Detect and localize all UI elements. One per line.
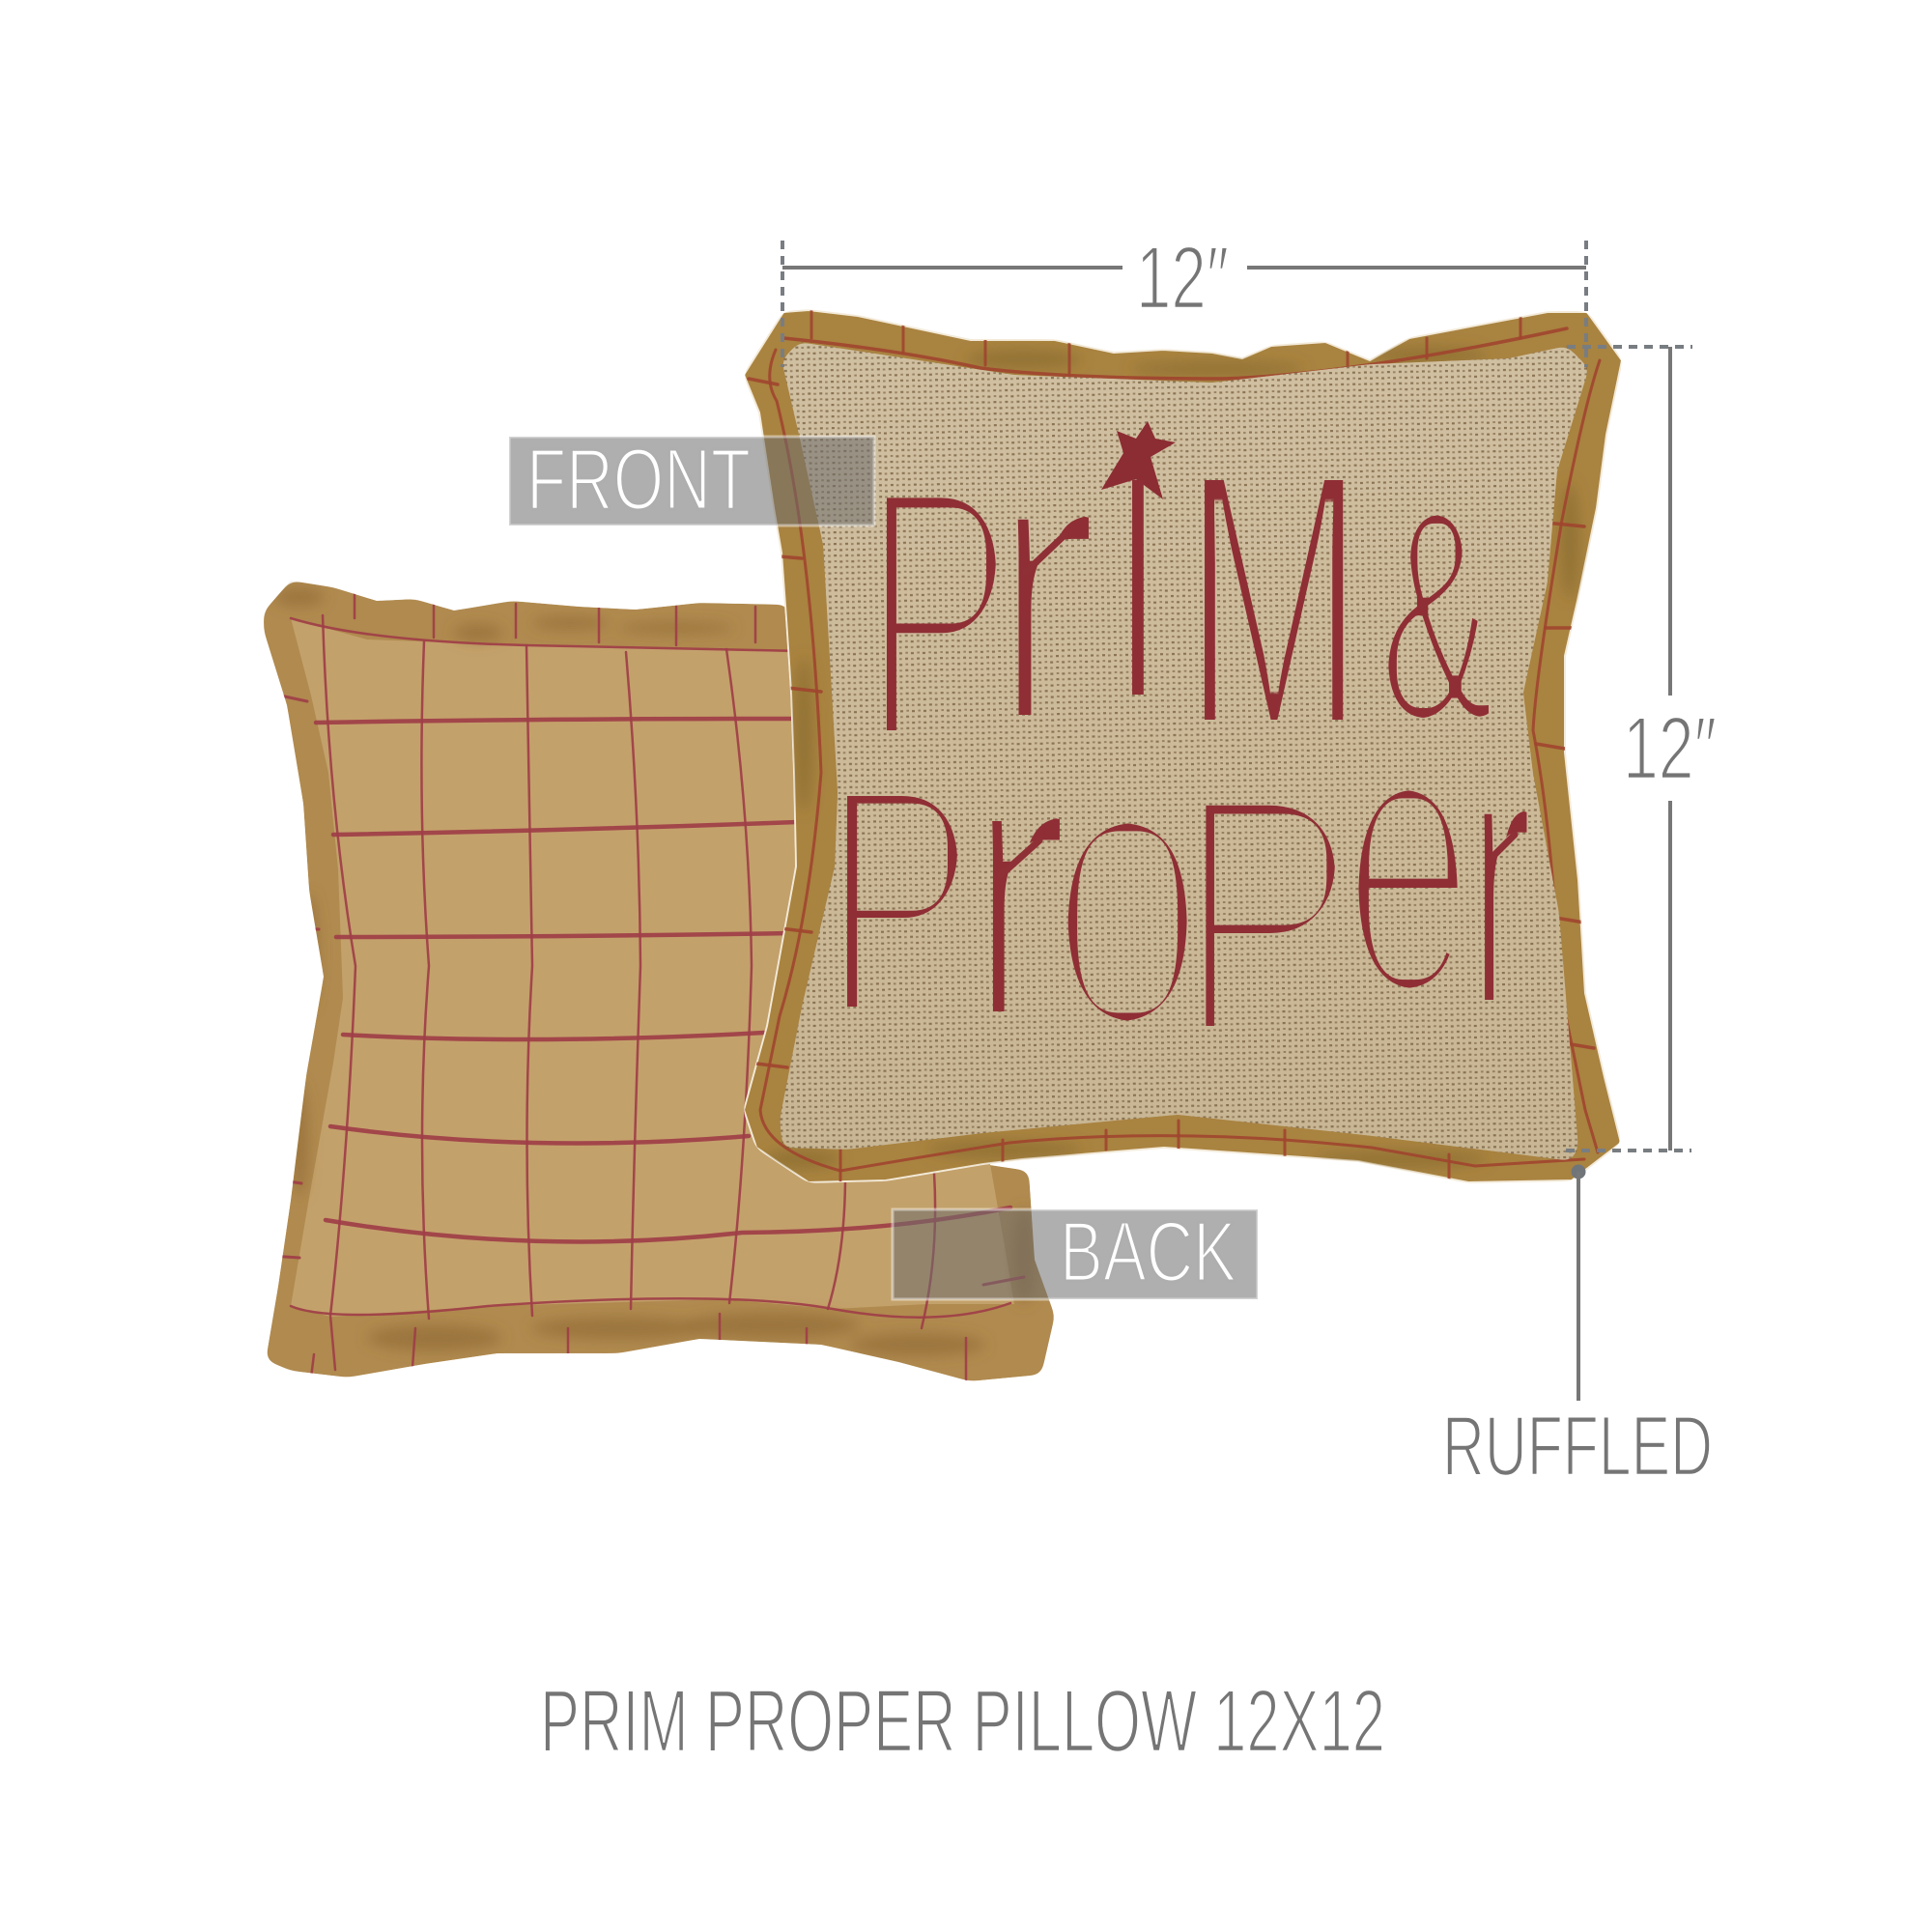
lettering second line o and p: o [1047, 670, 1208, 1110]
back ruffle [264, 581, 1055, 1381]
lettering r in Prim: r [959, 677, 1075, 1095]
height dimension: 12″ [1623, 699, 1717, 798]
ruffled callout [1442, 1165, 1713, 1493]
label: back [893, 1204, 1258, 1299]
lettering second line o and p: P [1175, 722, 1358, 1108]
lettering second line P [823, 638, 1474, 1086]
label: back: BACK [1060, 1204, 1236, 1299]
lettering second line P: e [1343, 638, 1474, 1077]
back pillow [264, 581, 1055, 1381]
lettering second line o and p [1047, 670, 1358, 1110]
lettering first line [863, 398, 1172, 816]
lettering r in Prim: r [984, 370, 1104, 801]
burlap front panel [773, 338, 1594, 1169]
back fabric panel [291, 618, 1014, 1317]
back fold shadows [274, 587, 1036, 1356]
stitched joins on the r arms [1001, 535, 1515, 875]
ruffled callout: RUFFLED [1442, 1398, 1713, 1493]
width dimension [782, 229, 1586, 367]
lettering last r: r [1465, 673, 1535, 1082]
lettering ampersand: & [1379, 446, 1494, 783]
embroidered star [1101, 421, 1176, 499]
title: PRIM PROPER PILLOW 12X12 [540, 1672, 1385, 1771]
lettering r in Prim [959, 370, 1104, 1095]
front ruffle plaid lines [749, 311, 1600, 1182]
lettering second line P: P [823, 717, 976, 1086]
burlap weave texture [773, 338, 1594, 1169]
width dimension: 12″ [1136, 229, 1229, 327]
front ruffle shading [763, 347, 1579, 1169]
lettering first line: I [1103, 398, 1172, 775]
front ruffle [744, 310, 1622, 1182]
label: front: FRONT [526, 432, 751, 528]
back plaid lines [270, 584, 1024, 1381]
lettering M: M [1182, 395, 1365, 803]
height dimension [1566, 347, 1717, 1151]
front pillow [744, 310, 1622, 1182]
lettering first line: P [863, 412, 1013, 816]
